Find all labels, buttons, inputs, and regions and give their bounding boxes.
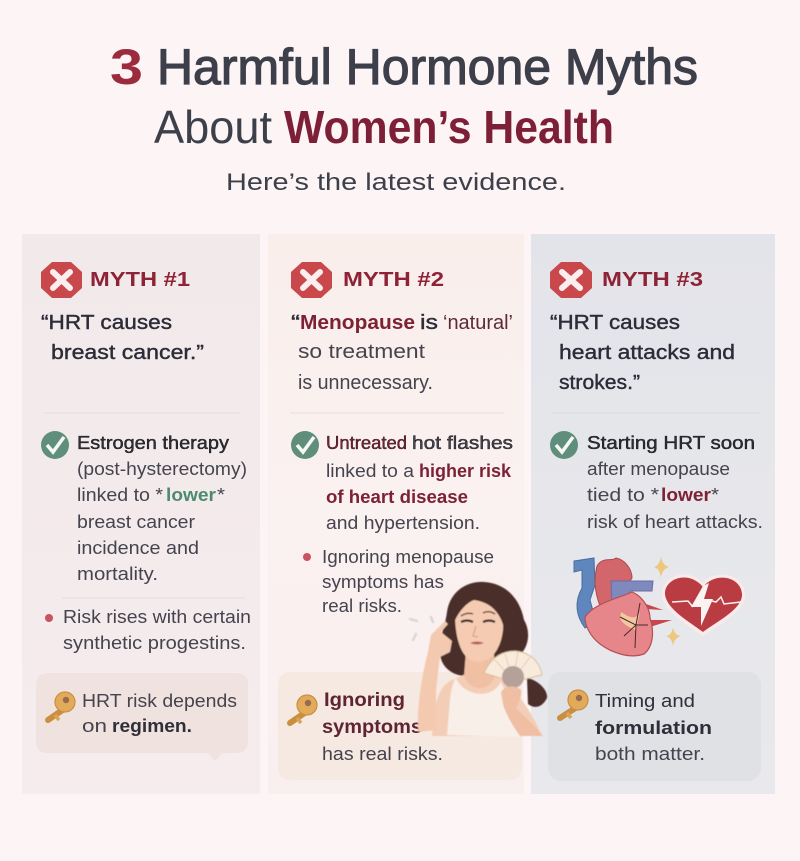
callout text: regimen.: [112, 716, 192, 736]
evidence text: breast cancer: [77, 512, 195, 532]
back hair: [440, 582, 528, 676]
illustration: woman with fan: [410, 582, 547, 737]
raised arm: [418, 621, 452, 732]
evidence text: lower: [166, 485, 216, 505]
evidence text: [326, 433, 513, 533]
icon: check: [41, 431, 69, 459]
risk note: [45, 607, 251, 653]
myth 1 quote: breast cancer.”: [51, 342, 204, 364]
neck: [464, 650, 495, 688]
callout text: formulation: [595, 718, 712, 738]
title: About: [154, 101, 272, 153]
sparkle: [666, 627, 681, 646]
callout text: HRT risk depends: [82, 691, 237, 711]
risk note: [303, 547, 494, 616]
myth 3 quote: “HRT causes: [550, 312, 680, 334]
evidence text: Untreated: [326, 433, 407, 453]
callout text: [82, 691, 237, 736]
evidence text: Starting HRT soon: [587, 433, 755, 453]
hair tail: [527, 678, 547, 707]
icon: check: [291, 431, 319, 459]
myth 1 quote: [41, 312, 204, 364]
myth 1 label: MYTH #1: [90, 269, 190, 291]
evidence text: linked to a: [326, 461, 415, 481]
evidence text: [77, 433, 247, 584]
evidence text: linked to *: [77, 485, 163, 505]
risk note: symptoms has: [322, 572, 444, 592]
icon: key: [290, 695, 317, 723]
callout: timing: [548, 672, 761, 781]
evidence text: *: [217, 485, 225, 505]
callout text: Ignoring: [324, 690, 405, 711]
illustration: heart with bolt: [662, 574, 745, 636]
risk note: real risks.: [322, 596, 402, 616]
bangs: [453, 590, 505, 628]
evidence text: Estrogen therapy: [77, 433, 229, 453]
evidence text: mortality.: [77, 564, 158, 584]
panel: myth 1: [22, 234, 260, 794]
myth 2 quote: ‘natural’: [443, 312, 513, 334]
evidence text: (post-hysterectomy): [77, 459, 247, 479]
myth 3 quote: strokes.”: [559, 372, 640, 394]
icon: key: [48, 692, 75, 720]
evidence text: tied to *: [587, 485, 659, 505]
illustration: anatomical heart: [574, 558, 672, 656]
myth 3 label: MYTH #3: [602, 269, 703, 291]
evidence text: lower: [661, 485, 711, 505]
icon: red x: [291, 262, 332, 298]
callout: symptoms: [278, 672, 522, 780]
risk note: Ignoring menopause: [322, 547, 494, 567]
evidence text: higher risk: [419, 461, 512, 481]
fan: [484, 651, 542, 682]
evidence text: risk of heart attacks.: [587, 512, 763, 532]
callout text: symptoms: [322, 717, 422, 738]
title: Harmful Hormone Myths: [157, 39, 698, 95]
callout text: [322, 690, 443, 764]
tank top: [447, 678, 520, 737]
evidence text: incidence and: [77, 538, 199, 558]
callout text: [595, 691, 712, 764]
myth 2 quote: is unnecessary.: [298, 372, 433, 394]
panel: myth 2: [268, 234, 524, 794]
myth 2 quote: “: [291, 312, 300, 334]
panel: myth 3: [531, 234, 775, 794]
myth 2 quote: Menopause: [300, 312, 415, 334]
torso skin: [432, 672, 542, 736]
myth 2 quote: so treatment: [298, 341, 425, 363]
myth 3 quote: heart attacks and: [559, 342, 735, 364]
evidence text: after menopause: [587, 459, 730, 479]
icon: red x: [550, 262, 592, 298]
icon: key: [560, 690, 588, 718]
evidence text: hot flashes: [412, 433, 513, 453]
myth 2 quote: [291, 312, 513, 394]
myth 1 quote: “HRT causes: [41, 312, 172, 334]
subtitle: Here’s the latest evidence.: [226, 169, 566, 196]
hand and forearm: [501, 686, 543, 736]
title: [110, 39, 698, 153]
callout text: on: [82, 716, 107, 736]
title: Women’s Health: [284, 101, 614, 153]
callout text: Timing and: [595, 691, 695, 711]
fan hub: [502, 666, 524, 688]
icon: check: [550, 431, 578, 459]
evidence text: *: [711, 485, 719, 505]
nose: [473, 626, 478, 637]
myth 2 quote: is: [420, 312, 438, 334]
eyes and brows: [461, 620, 495, 622]
sweat drops: [410, 617, 433, 640]
face: [455, 597, 503, 662]
callout: regimen: [36, 673, 248, 761]
title: 3: [110, 39, 143, 95]
evidence text: and hypertension.: [326, 513, 480, 533]
risk note: synthetic progestins.: [63, 633, 246, 653]
callout text: has real risks.: [322, 744, 443, 764]
risk note: Risk rises with certain: [63, 607, 251, 627]
callout text: both matter.: [595, 744, 705, 764]
myth 2 label: MYTH #2: [343, 269, 444, 291]
evidence text: of heart disease: [326, 487, 468, 507]
myth 3 quote: [550, 312, 735, 394]
sparkle: [654, 556, 669, 578]
icon: red x: [41, 262, 82, 298]
evidence text: [587, 433, 763, 532]
mouth: [470, 642, 484, 644]
